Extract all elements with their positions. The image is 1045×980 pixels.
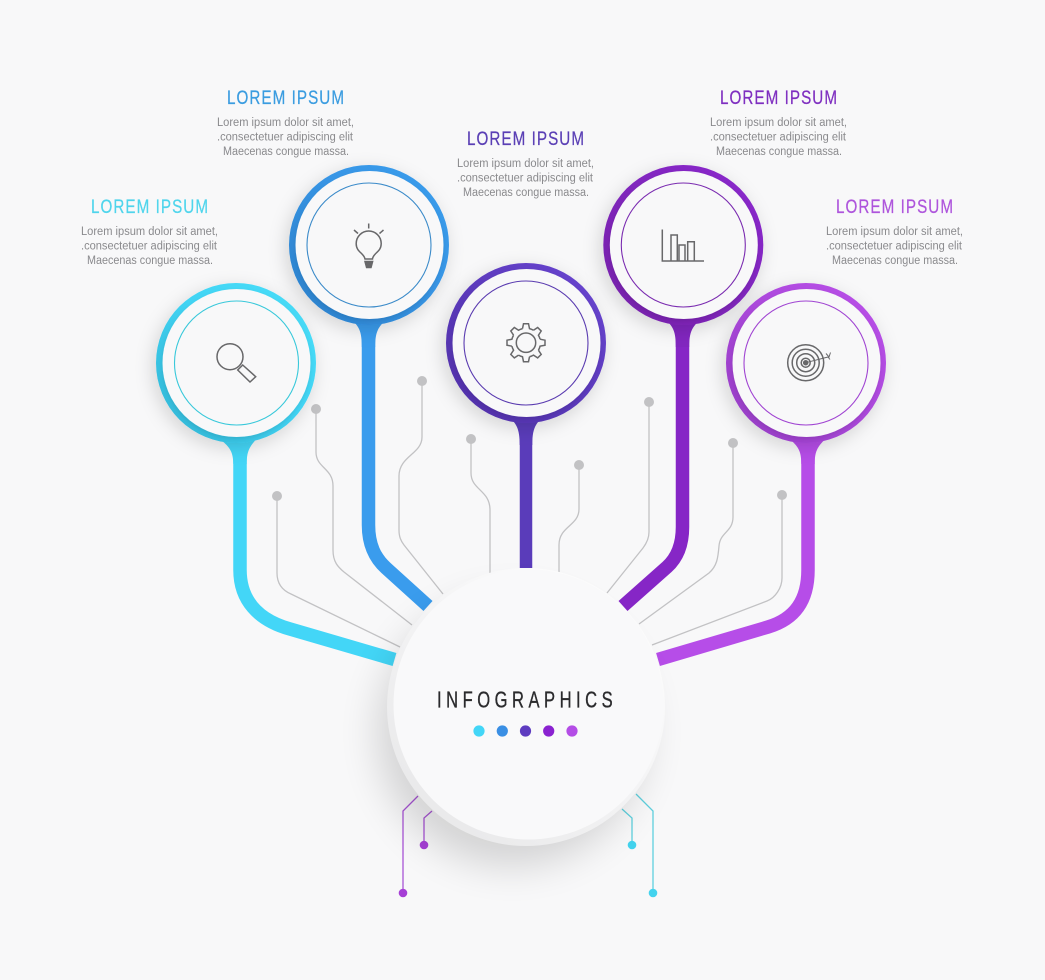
- node ring 4: [603, 165, 763, 325]
- purple line outer: [399, 796, 418, 897]
- circuit lines: grey connectors: [272, 376, 787, 647]
- heading 4: LOREM IPSUM: [720, 86, 837, 108]
- text block 2: Lorem ipsum dolor sit amet,: [217, 117, 354, 129]
- purple line inner: [420, 811, 432, 849]
- text block 3: Lorem ipsum dolor sit amet,: [457, 158, 594, 170]
- icon: target: [788, 345, 830, 381]
- text block 4: Lorem ipsum dolor sit amet,: [710, 117, 847, 129]
- grey line g: [639, 438, 738, 624]
- hub face: [394, 570, 664, 840]
- grey line d: [466, 434, 490, 573]
- connector stem 1: [212, 430, 394, 660]
- hub rim: [387, 568, 665, 846]
- node ring 2: [289, 165, 449, 325]
- panel: step 3: [446, 127, 606, 568]
- hub title: INFOGRAPHICS: [437, 688, 613, 713]
- node ring 1: [156, 283, 316, 443]
- panel: step 1: [81, 195, 394, 660]
- text block 4: Maecenas congue massa.: [716, 146, 842, 158]
- icon: magnifier: [217, 344, 256, 382]
- connector stem 5: [658, 430, 832, 660]
- text block 5: [826, 226, 963, 267]
- text block 3: Maecenas congue massa.: [463, 187, 589, 199]
- text block 1: .consectetuer adipiscing elit: [81, 240, 218, 252]
- heading 3: LOREM IPSUM: [467, 127, 584, 149]
- heading 1: LOREM IPSUM: [91, 195, 208, 217]
- grey line e: [559, 460, 584, 573]
- icon: light bulb: [354, 224, 384, 268]
- text block 2: .consectetuer adipiscing elit: [217, 132, 354, 144]
- heading 5: LOREM IPSUM: [836, 195, 953, 217]
- grey line b: [311, 404, 412, 625]
- text block 5: Lorem ipsum dolor sit amet,: [826, 226, 963, 238]
- panel: step 2: [217, 86, 449, 606]
- panel: step 4: [603, 86, 847, 606]
- grey line a: [272, 491, 400, 647]
- node ring 3: [446, 263, 606, 423]
- colour dots: [473, 725, 578, 737]
- text block 5: Maecenas congue massa.: [832, 255, 958, 267]
- icon: gear: [507, 324, 545, 362]
- hub shadow: [378, 598, 646, 866]
- grey line f: [607, 397, 654, 593]
- circuit lines: bottom coloured connectors: [399, 794, 657, 897]
- text block 4: .consectetuer adipiscing elit: [710, 132, 847, 144]
- connector stem 3: [502, 410, 550, 568]
- text block 3: .consectetuer adipiscing elit: [457, 172, 594, 184]
- connector stem 2: [345, 314, 428, 606]
- panel: step 5: [658, 195, 963, 660]
- text block 1: Lorem ipsum dolor sit amet,: [81, 226, 218, 238]
- panel: central hub: [378, 568, 665, 866]
- node ring 5: [726, 283, 886, 443]
- cyan line inner: [622, 809, 636, 849]
- text block 2: [217, 117, 354, 158]
- grey line h: [652, 490, 787, 645]
- text block 1: Maecenas congue massa.: [87, 255, 213, 267]
- heading 2: LOREM IPSUM: [227, 86, 344, 108]
- text block 3: [457, 158, 594, 199]
- cyan line outer: [636, 794, 657, 897]
- connector stem 4: [623, 314, 707, 606]
- text block 2: Maecenas congue massa.: [223, 146, 349, 158]
- icon: bar chart: [662, 230, 704, 261]
- text block 5: .consectetuer adipiscing elit: [826, 240, 963, 252]
- grey line c: [399, 376, 443, 594]
- text block 4: [710, 117, 847, 158]
- text block 1: [81, 226, 218, 267]
